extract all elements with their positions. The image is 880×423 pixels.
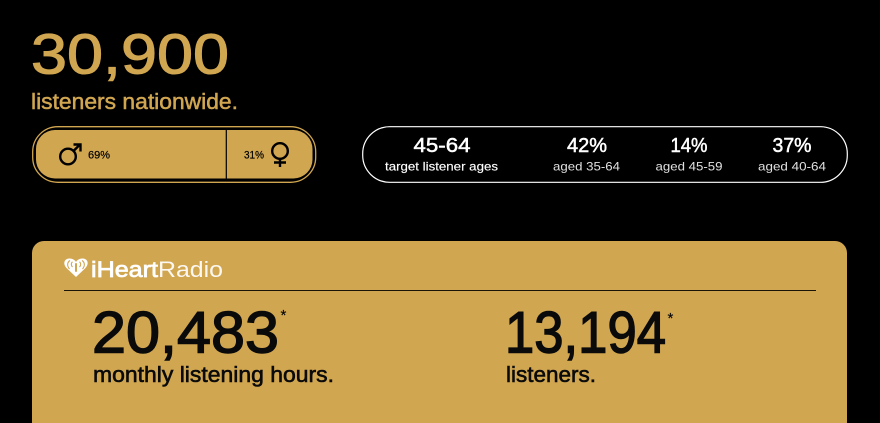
panel: iHeartRadio — [32, 241, 847, 423]
stat: aged 40-64: 37% — [772, 135, 812, 157]
stat: aged 35-64: aged 35-64 — [553, 160, 620, 174]
stat: aged 35-64: 42% — [567, 135, 607, 157]
panel: listener ages — [363, 127, 847, 182]
icon: heart with sound waves — [64, 258, 88, 277]
stat: aged 40-64: aged 40-64 — [758, 160, 826, 174]
stat: aged 45-59: aged 45-59 — [656, 160, 723, 174]
stat: aged 45-59 — [656, 135, 723, 174]
title: nationwide listener count: 30,900 — [31, 22, 229, 86]
stat: target ages: target listener ages — [385, 160, 498, 174]
stat: aged 40-64 — [758, 135, 826, 174]
logo: iHeartRadio: Radio — [158, 257, 223, 282]
stat: monthly listening hours: 20,483 — [92, 300, 279, 366]
stat: monthly listening hours: * — [280, 307, 286, 324]
stat: listeners: 13,194 — [505, 300, 666, 366]
panel: gender split — [33, 127, 316, 182]
logo wordmark: iHeart — [91, 257, 159, 282]
stat: aged 45-59: 14% — [670, 135, 708, 157]
male percentage: 69% — [88, 150, 110, 162]
stat: listeners: * — [668, 310, 674, 327]
stat: monthly listening hours: monthly listening hours. — [93, 362, 334, 387]
stat: aged 35-64 — [553, 135, 620, 174]
logo: iHeartRadio — [64, 257, 223, 282]
female percentage: 31% — [244, 150, 264, 162]
stat: target ages — [385, 135, 498, 174]
icon: female symbol — [272, 143, 288, 167]
subtitle: listeners nationwide. — [31, 89, 238, 114]
stat: target ages: 45-64 — [414, 135, 470, 157]
stat: listeners: listeners. — [506, 362, 596, 387]
stat: monthly listening hours — [92, 300, 334, 387]
icon: male symbol — [60, 144, 80, 164]
